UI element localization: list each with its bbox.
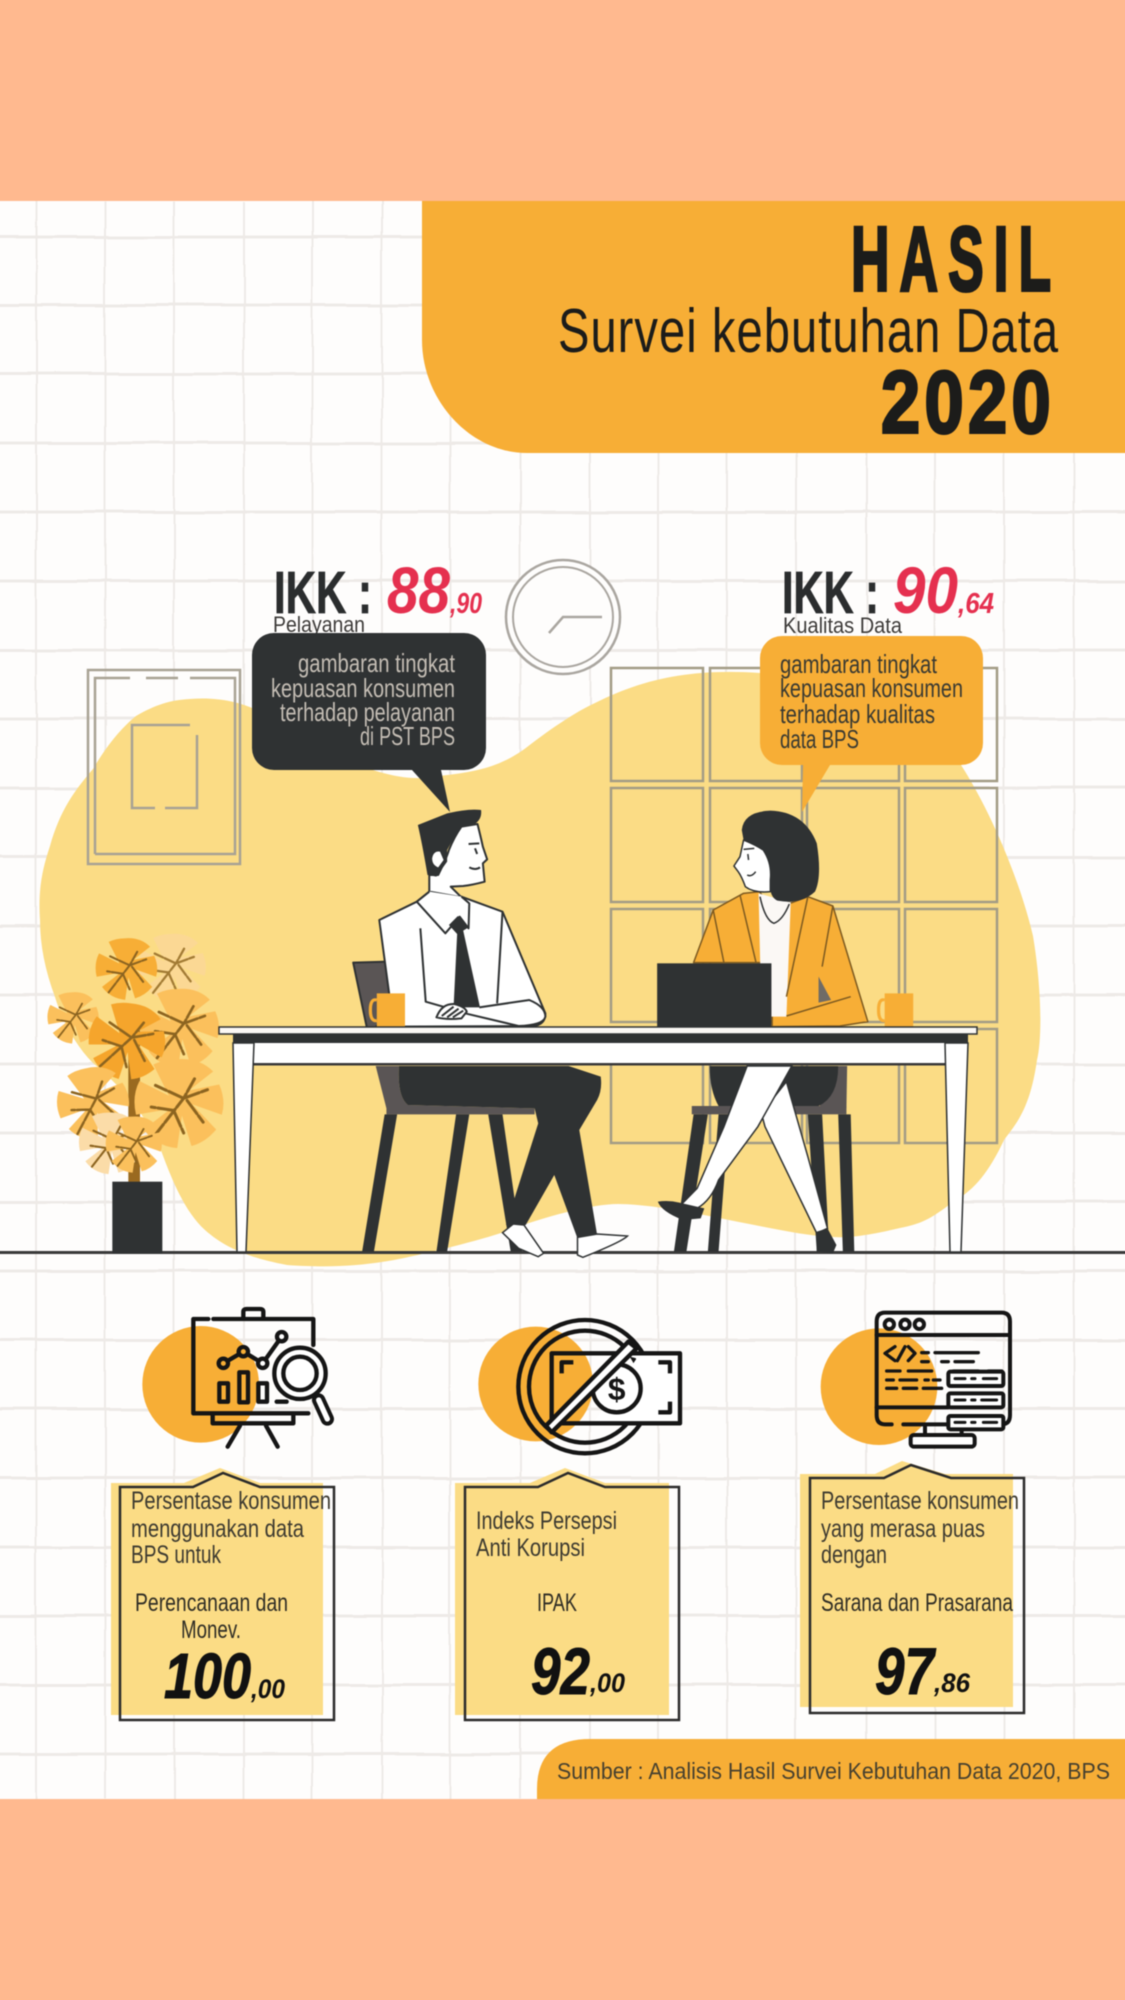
heading: IKK Kualitas Data: Kualitas Data — [783, 613, 903, 638]
icon: no bribery — [478, 1320, 680, 1453]
woman's back leg — [761, 1082, 827, 1233]
card 3: 97 — [875, 1634, 937, 1708]
ground line — [0, 1251, 1125, 1254]
speech bubble: pelayanan: gambaran tingkat — [298, 648, 456, 678]
card 2 — [455, 1468, 679, 1720]
speech bubble: kualitas data: terhadap kualitas — [780, 699, 935, 729]
card 1 — [111, 1468, 334, 1720]
card 2: Anti Korupsi — [476, 1534, 585, 1562]
woman's jacket — [694, 892, 868, 1027]
speech bubble: pelayanan: di PST BPS — [360, 721, 455, 751]
top band — [0, 0, 1125, 201]
icon: code window and server — [821, 1313, 1010, 1447]
woman's mug — [879, 993, 913, 1028]
laptop — [657, 963, 771, 1028]
card 1: Persentase konsumen — [131, 1487, 331, 1515]
speech bubble: pelayanan — [252, 633, 486, 812]
card 1: BPS untuk — [131, 1541, 221, 1569]
window — [611, 668, 997, 1143]
heading: IKK Pelayanan — [273, 553, 482, 637]
card 3: ,86 — [933, 1668, 971, 1698]
card 2: IPAK — [537, 1589, 577, 1617]
speech bubble: pelayanan: kepuasan konsumen — [271, 673, 455, 703]
woman's head — [734, 811, 819, 902]
woman's chair — [819, 1066, 847, 1108]
man's trousers — [399, 1066, 601, 1238]
card 2: Indeks Persepsi — [476, 1507, 617, 1535]
heading: IKK Pelayanan: 88 — [387, 553, 450, 627]
heading: IKK Kualitas Data — [782, 553, 994, 638]
man chair back — [353, 962, 401, 1027]
man's feet — [502, 1224, 627, 1257]
subtitle: Survei kebutuhan Data — [558, 296, 1058, 366]
woman's skirt — [710, 1066, 838, 1106]
icon: no bribery: $ — [608, 1371, 626, 1407]
clock — [506, 560, 620, 674]
year: 2020 — [881, 353, 1051, 451]
card 3: dengan — [821, 1541, 887, 1569]
speech bubble: kualitas data: kepuasan konsumen — [780, 673, 963, 703]
speech bubble: kualitas data — [760, 636, 983, 812]
heading: IKK Kualitas Data: IKK : — [782, 560, 879, 626]
card 1: Perencanaan dan — [135, 1589, 288, 1617]
heading: IKK Pelayanan: IKK : — [274, 560, 372, 626]
card 1: ,00 — [250, 1674, 285, 1704]
man's mug — [370, 993, 405, 1028]
bottom band — [0, 1799, 1125, 2000]
heading: IKK Pelayanan: Pelayanan — [273, 612, 365, 637]
man's chair — [376, 1066, 535, 1114]
woman's shoes — [658, 1201, 836, 1253]
table — [219, 1027, 977, 1252]
header panel — [422, 201, 1125, 453]
man's body — [379, 810, 545, 1027]
pot — [112, 1182, 162, 1253]
speech bubble: pelayanan: terhadap pelayanan — [280, 697, 455, 727]
woman's front leg — [679, 1066, 792, 1208]
chairs and legs — [362, 1066, 854, 1257]
source pill — [537, 1739, 1125, 1799]
title: HASIL: HASIL — [851, 207, 1051, 310]
heading: IKK Kualitas Data: 90 — [893, 553, 958, 627]
speech bubble: kualitas data: gambaran tingkat — [780, 649, 938, 679]
card 3 — [800, 1461, 1024, 1713]
heading: IKK Kualitas Data: ,64 — [957, 588, 994, 620]
card 1: menggunakan data — [131, 1515, 304, 1543]
man and woman, back layer — [353, 810, 913, 1028]
plant — [47, 934, 223, 1253]
heading: IKK Pelayanan: ,90 — [449, 588, 482, 620]
card 3: Sarana dan Prasarana — [821, 1589, 1013, 1617]
icon: presentation board — [142, 1309, 327, 1447]
card 1: Monev. — [181, 1616, 241, 1644]
yellow blob — [39, 672, 1040, 1266]
card 3: Persentase konsumen — [821, 1487, 1019, 1515]
speech bubble: kualitas data: data BPS — [780, 724, 859, 754]
card 2: ,00 — [589, 1668, 625, 1698]
card 2: 92 — [531, 1634, 590, 1708]
card 3: yang merasa puas — [821, 1515, 985, 1543]
card 1: 100 — [164, 1640, 251, 1712]
picture frame — [88, 670, 240, 864]
